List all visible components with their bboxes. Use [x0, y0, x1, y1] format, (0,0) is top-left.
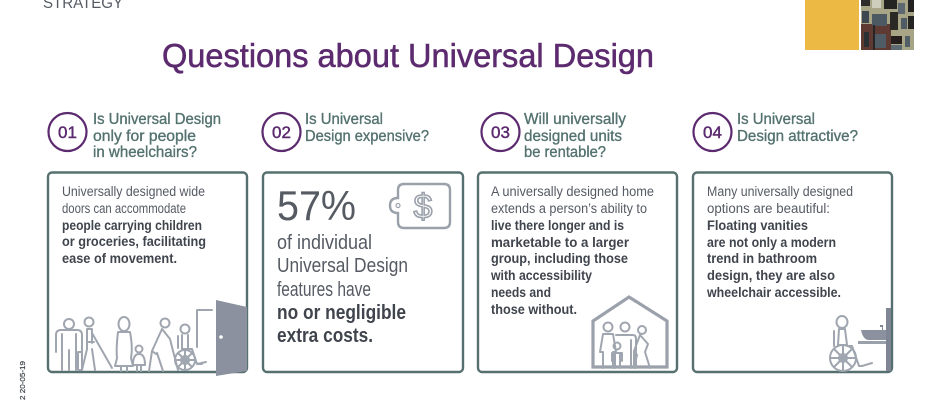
question 3 header: [482, 111, 626, 161]
panel: attractive: are not only a modern: [707, 235, 836, 250]
question 4 header: Design attractive?: [737, 128, 858, 145]
panel: cost: of individual: [277, 231, 372, 254]
question 2 header: 02: [272, 123, 291, 142]
question 1 header: [48, 111, 221, 161]
title: Questions about Universal Design: [162, 38, 654, 75]
panel: cost: [263, 172, 463, 372]
question 3 header: Will universally: [524, 111, 626, 128]
panel: rentable: needs and: [491, 285, 551, 300]
yellow accent block: [805, 0, 859, 50]
panel: wide doors: doors can accommodate: [62, 201, 186, 216]
question 4 header: Is Universal: [737, 111, 815, 128]
panel: wide doors: [48, 172, 247, 376]
icon: price tag with dollar sign: [390, 184, 450, 228]
question 2 header: Is Universal: [305, 111, 383, 128]
panel: cost: extra costs.: [277, 324, 373, 347]
icon: price tag with dollar sign: $: [414, 188, 433, 226]
footer date code: 2 20-05-19: [18, 361, 27, 400]
panel: cost: Universal Design: [277, 254, 408, 277]
panel: wide doors: Universally designed wide: [62, 184, 205, 199]
panel: cost: features have: [277, 278, 371, 301]
panel: attractive: options are beautiful:: [707, 201, 830, 216]
panel: wide doors: ease of movement.: [62, 251, 177, 266]
panel: attractive: [693, 172, 892, 372]
icon: people and open door: [56, 300, 247, 376]
panel: rentable: marketable to a larger: [491, 235, 630, 250]
panel: wide doors: or groceries, facilitating: [62, 234, 206, 249]
panel: attractive: wheelchair accessible.: [706, 285, 841, 300]
panel: attractive: trend in bathroom: [707, 251, 817, 266]
panel: cost: no or negligible: [277, 301, 406, 324]
panel: rentable: those without.: [491, 302, 577, 317]
question 4 header: [694, 111, 858, 151]
panel: attractive: Floating vanities: [707, 218, 808, 233]
big statistic: 57%: [277, 182, 356, 229]
question 2 header: [262, 111, 429, 151]
building photo: [861, 0, 914, 50]
question 1 header: 01: [58, 123, 77, 142]
icon: family inside house: [593, 297, 667, 368]
question 1 header: in wheelchairs?: [93, 144, 197, 161]
question 1 header: only for people: [93, 128, 196, 145]
question 2 header: Design expensive?: [305, 128, 429, 145]
question 3 header: be rentable?: [524, 144, 606, 161]
panel: rentable: [478, 172, 677, 372]
question 1 header: Is Universal Design: [93, 111, 221, 128]
panel: attractive: Many universally designed: [707, 184, 853, 199]
icon: wheelchair user at floating vanity: [830, 308, 891, 371]
panel: rentable: group, including those: [491, 251, 628, 266]
question 3 header: 03: [491, 123, 510, 142]
panel: rentable: extends a person’s ability to: [491, 201, 647, 216]
panel: wide doors: people carrying children: [62, 218, 202, 233]
panel: attractive: design, they are also: [707, 268, 835, 283]
panel: rentable: A universally designed home: [491, 184, 654, 199]
question 4 header: 04: [703, 123, 722, 142]
question 3 header: designed units: [524, 128, 622, 145]
panel: rentable: with accessibility: [490, 268, 592, 283]
panel: rentable: live there longer and is: [491, 218, 624, 233]
